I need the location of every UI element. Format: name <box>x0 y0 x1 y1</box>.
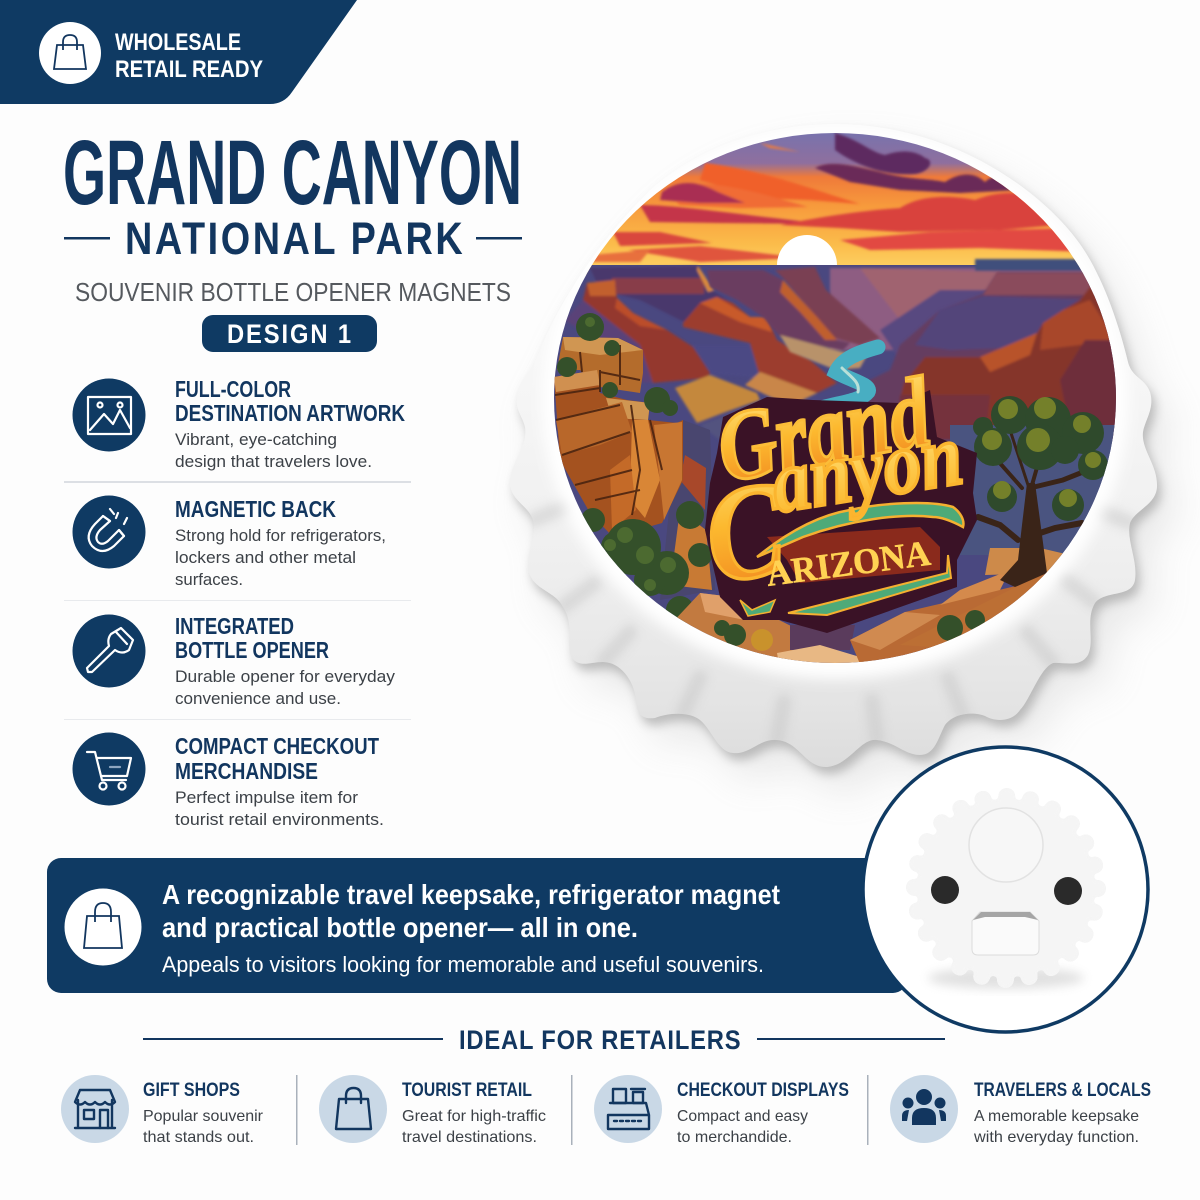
rubber dots <box>931 876 1082 905</box>
feature: checkout <box>72 732 384 829</box>
retailer: tourist retail: Great for high-traffic <box>402 1108 546 1125</box>
retailer: gift shops: Popular souvenir <box>143 1108 264 1125</box>
canyon right plateau <box>860 272 1120 440</box>
icon: cart <box>87 752 131 790</box>
cap artwork: canyon sunset <box>550 125 1120 670</box>
feature: checkout: tourist retail environments. <box>175 810 384 829</box>
inset: back of magnet <box>863 747 1148 1032</box>
section heading: ideal for retailers: IDEAL FOR RETAILERS <box>459 1026 741 1055</box>
canyon shadow base <box>550 265 1120 665</box>
feature: bottle opener: INTEGRATED <box>175 613 294 639</box>
cap body <box>510 124 1157 767</box>
subtitle with rules: NATIONAL PARK <box>125 213 463 264</box>
badge text <box>115 29 263 83</box>
feature: artwork: FULL-COLOR <box>175 376 291 402</box>
design pill: DESIGN 1 <box>227 320 351 349</box>
feature: artwork: design that travelers love. <box>175 452 372 471</box>
retailer: tourist retail <box>319 1075 546 1146</box>
feature: checkout: Perfect impulse item for <box>175 788 358 807</box>
bushes <box>557 313 712 624</box>
retailer: checkout displays: Compact and easy <box>677 1108 808 1125</box>
feature: bottle opener: Durable opener for everyday <box>175 667 395 686</box>
feature: bottle opener: BOTTLE OPENER <box>175 637 329 663</box>
river <box>815 347 878 410</box>
inset shadow <box>928 967 1084 989</box>
logo backing <box>705 390 977 633</box>
logo word: Canyon: anyon <box>765 405 969 531</box>
icon: opener <box>87 628 133 672</box>
logo word: Arizona: ARIZONA <box>764 533 933 594</box>
icon: shopping bag <box>84 903 122 948</box>
icon: bag <box>336 1088 371 1129</box>
icon: magnet <box>89 509 127 551</box>
retailer row <box>61 1075 1151 1146</box>
feature: bottle opener: convenience and use. <box>175 689 341 708</box>
feature: checkout: COMPACT CHECKOUT <box>175 733 379 759</box>
retailer: checkout displays: to merchandide. <box>677 1129 792 1146</box>
back cap body <box>914 796 1098 980</box>
feature: magnetic back <box>72 496 386 589</box>
feature: magnetic back: lockers and other metal <box>175 548 356 567</box>
left foreground cliffs <box>554 337 683 537</box>
feature: checkout: MERCHANDISE <box>175 758 318 784</box>
product: bottle cap magnet <box>510 124 1175 791</box>
feature: artwork <box>72 376 405 471</box>
sky <box>586 133 1084 275</box>
foreground rocks <box>677 548 1063 663</box>
icon: shopping bag <box>54 35 86 69</box>
feature: artwork: DESTINATION ARTWORK <box>175 400 405 426</box>
canyon left plateau <box>565 266 837 440</box>
canyon center plateau <box>707 267 880 370</box>
icon: display counter <box>608 1089 649 1129</box>
retailer: gift shops <box>61 1075 264 1146</box>
feature: bottle opener <box>72 613 395 708</box>
bush highlights <box>585 317 676 591</box>
retailer: travelers and locals: TRAVELERS & LOCALS <box>974 1080 1151 1101</box>
behind logo and tree <box>660 420 1120 600</box>
retailer: travelers and locals: A memorable keepsake <box>974 1108 1139 1125</box>
feature: magnetic back: Strong hold for refrigerators, <box>175 526 386 545</box>
icon: people <box>902 1089 946 1125</box>
banner text: and practical bottle opener— all in one. <box>162 912 638 943</box>
retailer: gift shops: that stands out. <box>143 1129 254 1146</box>
badge: wholesale retail ready <box>0 0 357 104</box>
logo plate and ribbons <box>740 503 963 616</box>
retailer: travelers and locals: with everyday function. <box>973 1129 1139 1146</box>
retailer: tourist retail: TOURIST RETAIL <box>402 1080 532 1101</box>
icon: picture <box>88 397 131 434</box>
opener slot <box>972 912 1039 955</box>
retailer: tourist retail: travel destinations. <box>402 1129 537 1146</box>
badge text: WHOLESALE <box>115 29 241 56</box>
magnet recess <box>969 808 1043 882</box>
sun <box>777 235 837 265</box>
logo: Grand Canyon Arizona <box>705 373 977 633</box>
badge text: RETAIL READY <box>115 56 263 83</box>
retailer: travelers and locals <box>890 1075 1151 1146</box>
retailer: checkout displays: CHECKOUT DISPLAYS <box>677 1080 849 1101</box>
feature: magnetic back: surfaces. <box>175 570 243 589</box>
main title: GRAND CANYON <box>63 122 522 224</box>
cap shadow <box>514 131 1175 791</box>
title block <box>63 122 522 352</box>
retailer: gift shops: GIFT SHOPS <box>143 1080 240 1101</box>
clouds <box>585 133 1090 262</box>
banner text: A recognizable travel keepsake, refrigerator magnet <box>162 879 780 910</box>
feature: magnetic back: MAGNETIC BACK <box>175 496 336 522</box>
tree <box>973 396 1108 587</box>
feature list <box>64 376 411 829</box>
product line: SOUVENIR BOTTLE OPENER MAGNETS <box>75 277 511 307</box>
design pill <box>202 315 377 352</box>
logo word: Grand: Grand <box>709 355 940 504</box>
banner text: Appeals to visitors looking for memorable and useful souvenirs. <box>162 952 764 977</box>
feature: artwork: Vibrant, eye-catching <box>175 430 337 449</box>
far ridges <box>830 259 1120 360</box>
logo word: Canyon: C <box>695 453 796 613</box>
icon: storefront <box>75 1090 115 1128</box>
retailer: checkout displays <box>594 1075 849 1146</box>
banner: keepsake message <box>47 858 907 993</box>
banner text <box>162 879 780 977</box>
